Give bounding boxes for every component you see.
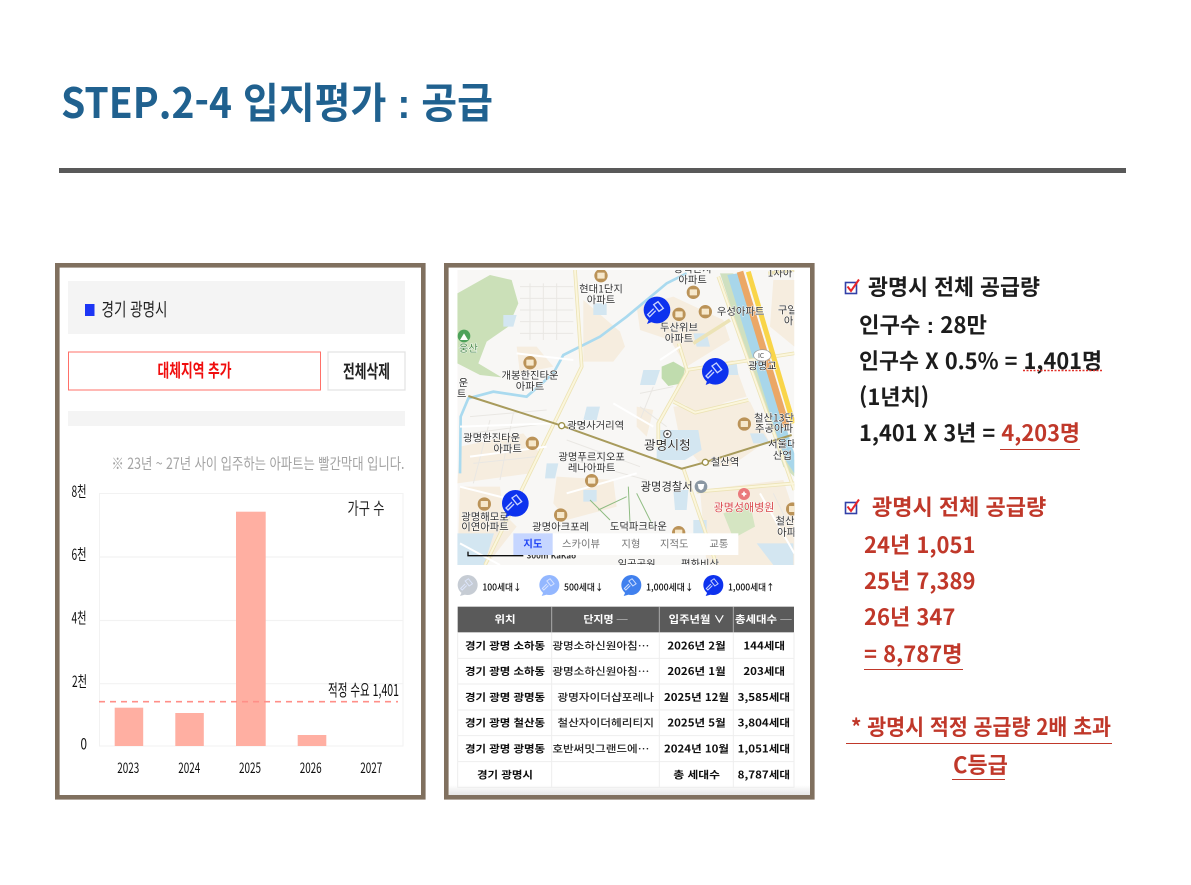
text block: total supply and grade: 광명시 전체 공급량	[872, 490, 1046, 522]
map labels: 트	[457, 385, 466, 400]
series label: 가구 수	[348, 494, 384, 520]
x axis labels: 2026	[300, 758, 322, 778]
text block: supply need calculation	[846, 270, 1102, 450]
map labels: 아파트	[516, 378, 544, 393]
text block: total supply and grade: 24년 1,051	[864, 528, 975, 560]
pin 3	[502, 490, 529, 517]
table rows: 경기 광명 철산동	[465, 715, 546, 730]
map labels	[457, 261, 797, 570]
highway	[740, 272, 793, 427]
title: STEP.2-4 입지평가 : 공급	[61, 70, 493, 131]
table rows: 경기 광명 소하동	[465, 663, 546, 678]
map type tabs: 교통	[709, 535, 728, 550]
map labels: 철산역	[711, 453, 739, 468]
map labels: 아	[784, 312, 794, 327]
table rows: 경기 광명 광명동	[465, 689, 546, 704]
map labels: 철산	[775, 512, 795, 527]
table rows: 2026년 2월	[667, 637, 726, 652]
legend	[458, 575, 775, 596]
y axis labels: 4천	[72, 606, 86, 628]
legend and table	[458, 575, 794, 787]
table rows: 2025년 12월	[664, 689, 729, 704]
text block: supply need calculation: 인구수 : 28만	[859, 308, 987, 340]
table rows: 총 세대수	[673, 766, 721, 781]
table rows: 경기 광명 광명동	[465, 741, 546, 756]
table rows: 2026년 1월	[667, 663, 726, 678]
map labels: 운	[459, 375, 468, 390]
pin 2	[702, 358, 729, 385]
table rows	[465, 637, 790, 781]
map labels: 서울대	[768, 436, 797, 451]
y axis labels: 0	[80, 732, 87, 754]
table rows: 2025년 5월	[667, 715, 726, 730]
demand line: 적정 수요 1,401	[328, 677, 399, 701]
map labels: 우성아파트	[717, 303, 764, 318]
y axis labels: 2천	[72, 670, 87, 692]
subway line	[468, 396, 792, 469]
river	[460, 273, 687, 473]
y axis labels: 8천	[72, 480, 86, 502]
chart note: ※ 23년 ~ 27년 사이 입주하는 아파트는 빨간막대 입니다.	[112, 452, 404, 474]
IC sign	[754, 350, 771, 361]
table rows: 3,804세대	[738, 715, 790, 730]
table rows: 호반써밋그랜드에⋯	[552, 741, 649, 756]
scale bar	[467, 552, 576, 558]
table rows: 철산자이더헤리티지	[557, 715, 654, 730]
legend: 100세대↓	[482, 581, 522, 594]
legend: 1,000세대↑	[728, 581, 775, 594]
bars	[115, 512, 326, 746]
map labels: 광명해모로	[461, 509, 509, 524]
map labels: 레나아파트	[568, 460, 615, 475]
y axis labels	[72, 480, 87, 754]
map labels: 개봉한진타운	[501, 367, 559, 382]
table rows: 203세대	[743, 663, 785, 678]
text block: supply need calculation: 1,401 X 3년 = 4,203명	[859, 416, 1080, 448]
panel: map and table	[446, 261, 812, 797]
text block: supply need calculation: 광명시 전체 공급량	[868, 270, 1040, 302]
map labels: 광명시청	[644, 434, 691, 453]
region header: 경기 광명시	[102, 296, 168, 322]
text block: supply need calculation: 인구수 X 0.5% = 1,401명	[859, 344, 1102, 376]
map type tabs: 지형	[621, 535, 640, 550]
pin 1	[644, 297, 670, 324]
data table	[458, 607, 794, 787]
park	[457, 275, 518, 377]
police and hospital markers	[458, 330, 750, 500]
x axis labels: 2025	[239, 758, 261, 778]
map labels: 평화비산	[681, 555, 719, 570]
map type tabs	[513, 533, 738, 555]
table rows: 경기 광명시	[477, 766, 533, 781]
roads	[485, 270, 794, 565]
map labels: 광덕단지	[674, 261, 712, 276]
table header: 입주년월 ∨	[669, 611, 725, 626]
map labels: 구일	[778, 301, 797, 316]
map labels: 광명푸르지오포	[558, 449, 625, 464]
y axis labels: 6천	[72, 543, 86, 565]
scale bar: 300m KaKao	[527, 551, 576, 562]
button: delete all: 전체삭제	[343, 358, 390, 384]
map labels: 아파트	[587, 291, 615, 306]
text block: total supply and grade: = 8,787명	[864, 637, 962, 669]
walking trails	[590, 487, 653, 527]
small streets	[470, 283, 794, 537]
map labels: 두산위브	[660, 319, 698, 334]
map labels: 아파트	[493, 441, 522, 456]
map labels: 광명아크포레	[532, 519, 589, 534]
map labels: 이연아파트	[461, 519, 509, 534]
legend: 1,000세대↓	[646, 581, 694, 594]
text block: total supply and grade: 25년 7,389	[864, 564, 975, 596]
map type tabs: 지적도	[660, 535, 689, 550]
map labels: 광명교	[748, 357, 777, 372]
table header	[494, 611, 792, 626]
map labels: 광명성애병원	[714, 499, 774, 515]
button: add alternative region	[68, 352, 320, 390]
map labels: 아파	[777, 524, 797, 539]
text block: total supply and grade: * 광명시 적정 공급량 2배 초과	[851, 710, 1111, 742]
table rows: 광명소하신원아침⋯	[552, 663, 649, 678]
table rows: 8,787세대	[738, 766, 790, 781]
map labels: 광명경찰서	[641, 478, 693, 494]
table header: 단지명 ─	[583, 611, 628, 626]
map labels: 일곡공원	[618, 555, 656, 570]
table rows: 광명자이더샵포레나	[557, 689, 655, 704]
region header	[68, 281, 405, 334]
icon: checkbox	[846, 500, 859, 514]
x axis labels	[117, 758, 382, 778]
map labels: 웅산	[459, 340, 478, 355]
icon: checkbox	[846, 280, 859, 294]
text block: total supply and grade: 26년 347	[864, 600, 955, 632]
table rows: 2024년 10월	[664, 741, 729, 756]
map	[457, 261, 799, 570]
map labels: 광명사거리역	[567, 417, 624, 432]
table rows: 3,585세대	[738, 689, 790, 704]
panel: supply chart	[57, 265, 423, 797]
map labels: 도덕파크타운	[610, 518, 667, 533]
map labels: 아파트	[665, 330, 693, 345]
x axis labels: 2027	[360, 758, 382, 778]
map labels: 주공아파	[755, 420, 793, 435]
button: delete all	[328, 352, 405, 390]
text block: supply need calculation: (1년치)	[859, 380, 929, 412]
map type tabs: 지도	[523, 535, 543, 550]
x axis labels: 2024	[178, 758, 200, 778]
legend: 500세대↓	[564, 581, 604, 594]
map labels: 철산13단	[754, 409, 794, 424]
map labels: 1차아	[768, 265, 793, 280]
table header: 위치	[494, 611, 516, 626]
text block: total supply and grade	[846, 490, 1112, 780]
map labels: 산업	[773, 447, 792, 462]
text block: total supply and grade: C등급	[953, 748, 1008, 780]
button: add alternative region: 대체지역 추가	[158, 357, 232, 383]
x axis labels: 2023	[117, 758, 139, 778]
table rows: 경기 광명 소하동	[465, 637, 546, 652]
table rows: 광명소하신원아침⋯	[552, 637, 649, 652]
table rows: 1,051세대	[738, 741, 790, 756]
map type tabs: 스카이뷰	[562, 535, 600, 550]
IC sign: IC	[758, 350, 764, 360]
table header: 총세대수 ─	[735, 611, 792, 626]
table rows: 144세대	[743, 637, 785, 652]
apartment markers	[478, 269, 799, 539]
map labels: 광명한진타운	[463, 429, 520, 444]
bar chart	[72, 480, 403, 778]
map labels: 현대1단지	[579, 281, 623, 296]
map labels: 아파트	[678, 271, 707, 286]
